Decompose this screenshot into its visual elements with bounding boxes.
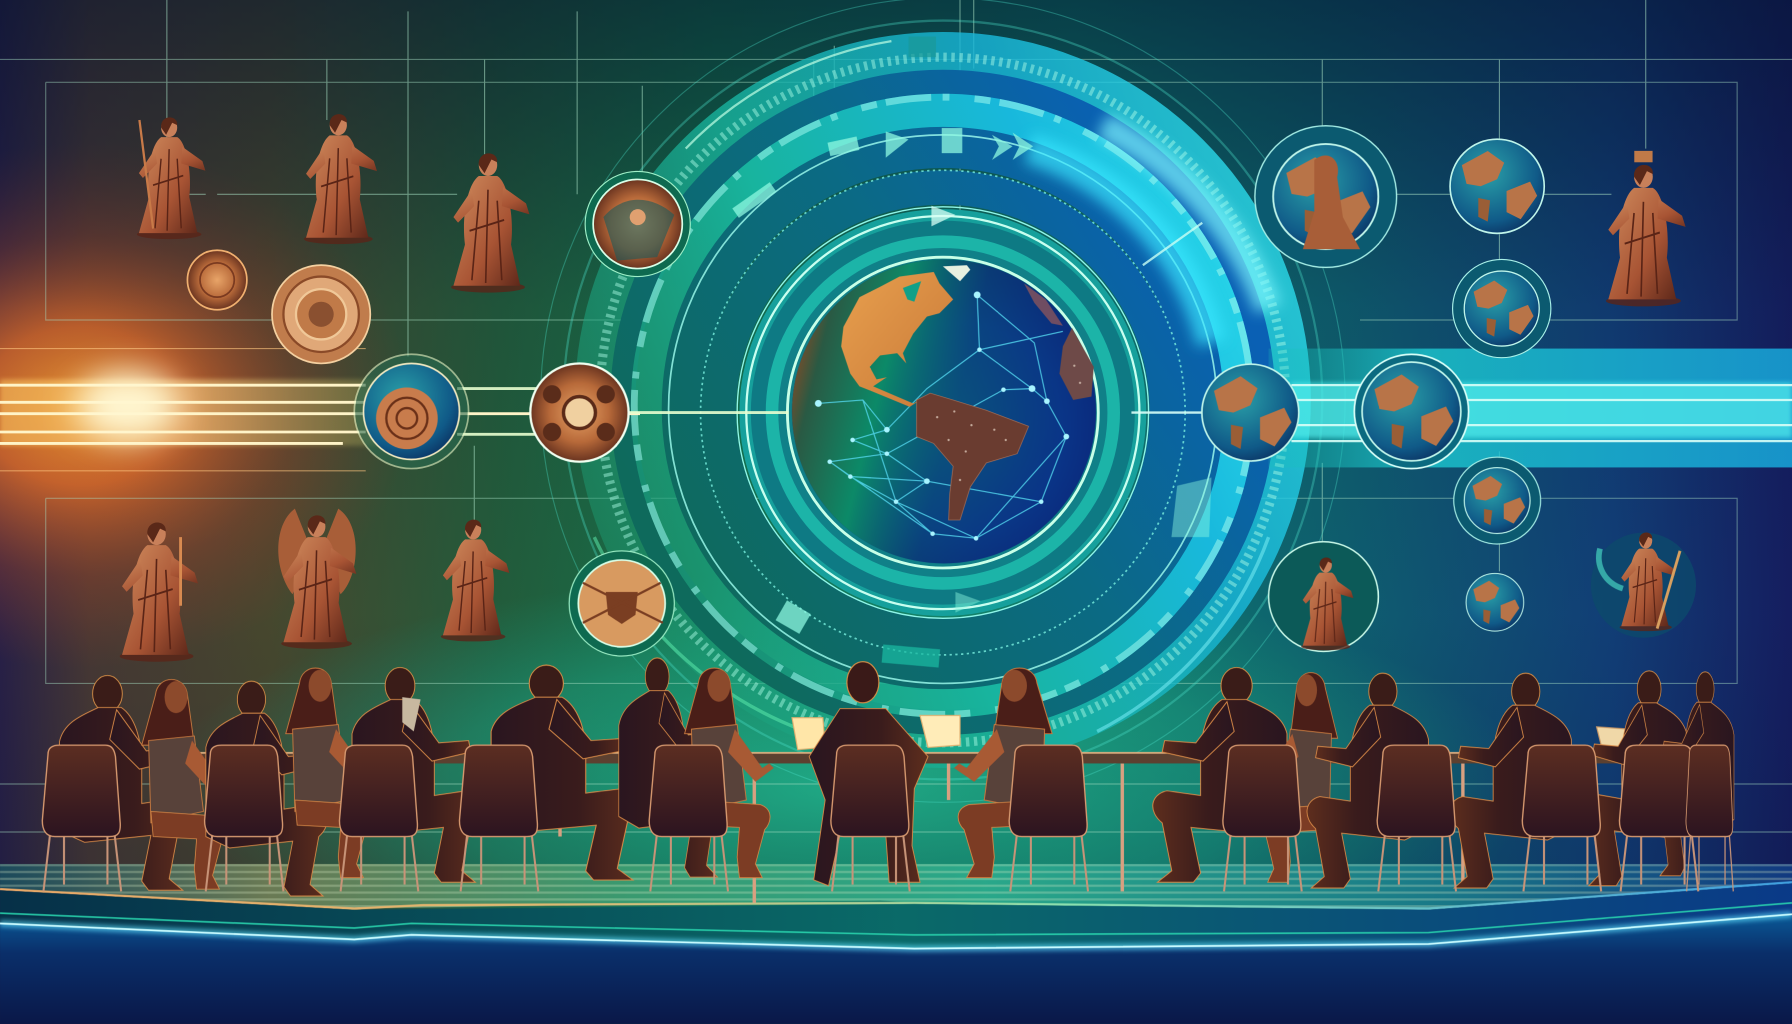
- coin: small copper: [187, 250, 247, 310]
- person 2: [142, 679, 231, 889]
- globe medallion: on beam left: [1202, 364, 1299, 461]
- person 14: [1450, 673, 1571, 888]
- conference table: [189, 752, 1623, 903]
- chair 10: [1522, 745, 1601, 891]
- city lights: [936, 365, 1081, 481]
- network lines: [818, 295, 1066, 538]
- person 8: [685, 668, 774, 878]
- medallion: copper artifacts: [530, 363, 629, 462]
- statue: robed woman: [451, 153, 529, 293]
- stage base with neon edge: [0, 883, 1792, 1024]
- central globe: [792, 259, 1096, 563]
- person 12: [1257, 673, 1338, 882]
- laptop center: [920, 715, 960, 747]
- person 6: [491, 665, 638, 880]
- reflective stage floor: [0, 864, 1792, 909]
- person 11: [1153, 667, 1287, 882]
- left orange beam: [0, 349, 789, 471]
- coin globe: [1466, 573, 1524, 631]
- laptops: [792, 715, 1630, 750]
- person 13: [1307, 673, 1428, 888]
- medallion: angels: [585, 171, 690, 277]
- chair 5: [649, 745, 728, 891]
- statue: seated robed woman: [441, 520, 509, 641]
- person 15: [1585, 671, 1688, 886]
- network nodes: [815, 291, 1069, 541]
- statue: robed figure: [304, 114, 377, 244]
- medallion: warrior and bird: [1591, 533, 1696, 638]
- chair 9: [1377, 745, 1456, 891]
- chair 4: [459, 745, 538, 891]
- statue: winged angel: [278, 509, 356, 649]
- globe medallion: upper: [1450, 139, 1544, 233]
- laptop left: [792, 718, 825, 750]
- seated council members: [59, 658, 1734, 896]
- coin: concentric copper: [272, 265, 370, 363]
- laptop right: [1597, 727, 1630, 750]
- chair 1: [42, 745, 121, 891]
- chair 11: [1619, 745, 1698, 891]
- statue: torch bearer: [120, 522, 198, 662]
- chair 12: [1686, 745, 1733, 891]
- left historic figures and medallions: [120, 114, 690, 662]
- ring highlight arcs: [594, 41, 1286, 754]
- right historic figures and globes: [1202, 126, 1696, 651]
- person 10: [954, 668, 1052, 878]
- light beams: [0, 349, 1792, 471]
- person 7: [619, 658, 721, 877]
- person 4: [286, 668, 375, 878]
- person 3: [206, 681, 327, 896]
- continents: [841, 272, 953, 407]
- medallion: spiral globe: [354, 354, 469, 469]
- person 16: [1657, 672, 1734, 876]
- right cyan beam: [1131, 349, 1792, 467]
- chair 3: [339, 745, 418, 891]
- chairs: [42, 745, 1733, 891]
- chair 6: [831, 745, 910, 891]
- globe medallion: lower small: [1454, 457, 1541, 544]
- person 5 bearded: [352, 667, 480, 882]
- medallion: crest: [569, 551, 674, 656]
- globe medallion: small: [1453, 259, 1551, 358]
- statue: crowned woman: [1606, 151, 1686, 306]
- chair 7: [1009, 745, 1088, 891]
- globe medallion: seated figure: [1255, 126, 1397, 267]
- statue: staff elder: [137, 117, 205, 239]
- medallion: ancient figure: [1269, 542, 1378, 651]
- person 1: [59, 675, 187, 890]
- chair 2: [205, 745, 283, 891]
- globe medallion: on beam right: [1354, 354, 1469, 469]
- chair 8: [1223, 745, 1302, 891]
- tech glyph blocks on the ring: [732, 37, 1211, 668]
- central holographic rings: [541, 0, 1345, 802]
- person 9: [809, 662, 928, 886]
